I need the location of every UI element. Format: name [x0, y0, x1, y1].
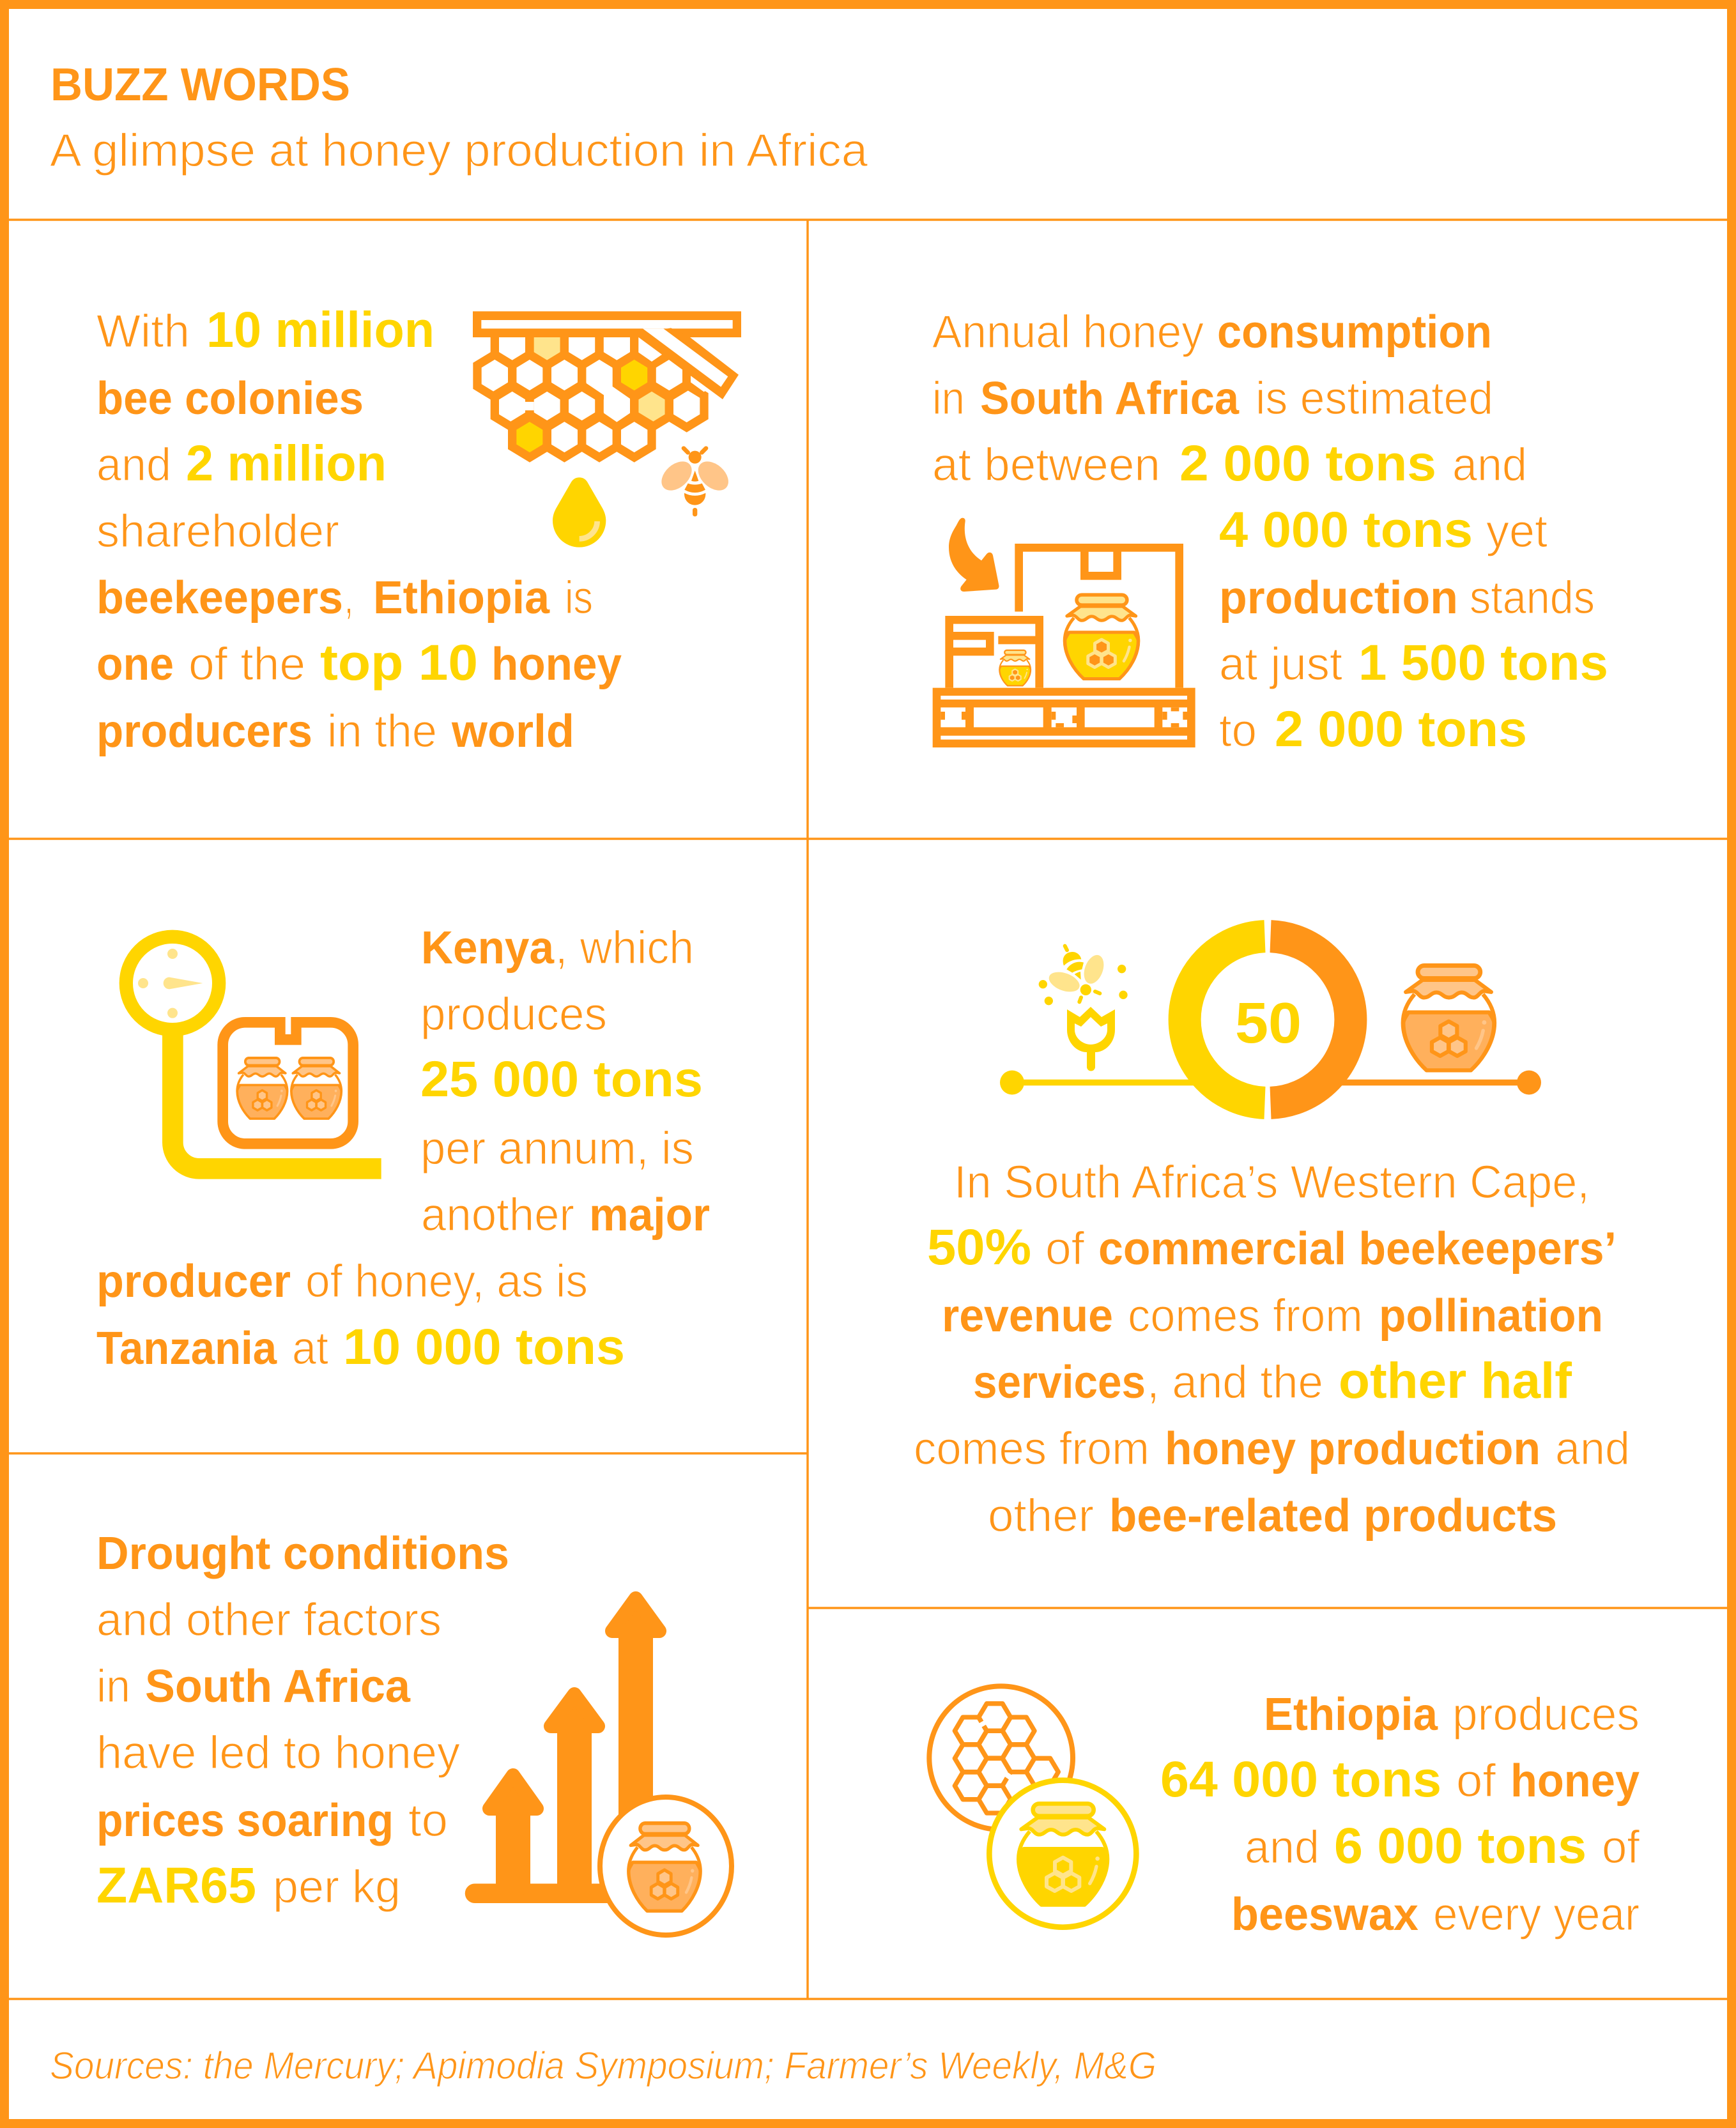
footer: sources: Sources: the Mercury; Apimodia Symposium; Farmer’s Weekly, M&G — [50, 2044, 1156, 2087]
text block: Ethiopia bee colonies: With — [96, 306, 190, 357]
text block: drought and prices: per kg — [273, 1862, 401, 1913]
icon: honey jar — [1018, 1803, 1107, 1905]
text block: Kenya and Tanzania: per annum, is — [420, 1123, 694, 1174]
text block: Ethiopia honey and beeswax — [1160, 1689, 1640, 1940]
text block: Western Cape pollination: honey production — [1165, 1423, 1540, 1474]
icon: scale with honey jars — [126, 937, 381, 1168]
icon: small honey jar — [999, 650, 1031, 685]
title: BUZZ WORDS — [50, 59, 350, 111]
text block: Kenya and Tanzania: major — [589, 1190, 710, 1241]
text block: Ethiopia honey and beeswax: of — [1602, 1822, 1640, 1873]
icon: honeycomb — [473, 311, 741, 457]
text block: South Africa consumption: is estimated — [1256, 373, 1493, 424]
text block: Ethiopia bee colonies — [96, 301, 622, 757]
text block: Kenya and Tanzania: another — [421, 1190, 574, 1241]
donut graphic — [1000, 937, 1541, 1103]
text block: South Africa consumption: in — [932, 373, 965, 424]
icon: parcel — [223, 1017, 353, 1144]
text block: drought and prices: prices soaring — [96, 1795, 394, 1846]
icon: pallet — [933, 688, 1195, 747]
text block: Kenya and Tanzania: produces — [420, 989, 607, 1040]
text block: Ethiopia bee colonies: 2 million — [186, 434, 387, 491]
text block: South Africa consumption: yet — [1486, 506, 1548, 557]
text block: drought and prices: ZAR65 — [96, 1856, 256, 1913]
text block: South Africa consumption: and — [1452, 440, 1527, 491]
text block: South Africa consumption: Annual honey — [932, 307, 1204, 358]
text block: Western Cape pollination: commercial beekeepers’ — [1098, 1223, 1617, 1275]
text block: Western Cape pollination: pollination — [1379, 1290, 1603, 1342]
icon: large honey jar — [1064, 595, 1139, 679]
text block: Kenya and Tanzania: 25 000 tons — [420, 1050, 703, 1107]
text block: Ethiopia honey and beeswax: 6 000 tons — [1334, 1817, 1586, 1874]
text block: South Africa consumption: 2 000 tons — [1275, 700, 1527, 757]
text block: Ethiopia bee colonies: of the — [188, 639, 305, 690]
arrow medium — [551, 1694, 598, 1888]
text block: Kenya and Tanzania: at — [292, 1323, 328, 1374]
icon: large box — [1019, 547, 1179, 688]
text block: Ethiopia honey and beeswax: produces — [1452, 1689, 1640, 1740]
icon: bee — [656, 448, 734, 516]
icon: honey jar left — [237, 1058, 288, 1119]
text block: Western Cape pollination: 50% — [927, 1218, 1031, 1275]
text block: Ethiopia bee colonies: world — [451, 706, 574, 757]
panel: Ethiopia bee colonies — [96, 301, 741, 757]
text block: drought and prices: to — [408, 1795, 448, 1846]
text block: Western Cape pollination: bee-related products — [1109, 1490, 1557, 1542]
text block: Western Cape pollination: and — [1555, 1423, 1630, 1474]
icon: scale dial — [126, 937, 381, 1168]
text block: Western Cape pollination: of — [1045, 1223, 1085, 1275]
text block: South Africa consumption: 4 000 tons — [1219, 501, 1473, 558]
icon: tulip with bee — [1039, 946, 1128, 1071]
text block: Kenya and Tanzania: Kenya — [421, 922, 555, 974]
text block: Ethiopia bee colonies: 10 million — [206, 301, 434, 358]
text block: Ethiopia honey and beeswax: of — [1456, 1756, 1496, 1807]
text block: Western Cape pollination: comes from — [1128, 1290, 1363, 1342]
subtitle: A glimpse at honey production in Africa — [50, 125, 868, 176]
text block: Western Cape pollination: services — [973, 1357, 1146, 1408]
text block: South Africa consumption: South Africa — [980, 373, 1240, 424]
text block: drought and prices: South Africa — [145, 1661, 411, 1712]
text block: Ethiopia bee colonies: Ethiopia — [373, 572, 550, 624]
icon: honey jar — [629, 1823, 700, 1911]
panel: South Africa consumption — [932, 307, 1608, 757]
text block: Kenya and Tanzania: 10 000 tons — [343, 1318, 625, 1375]
text block: South Africa consumption — [932, 307, 1608, 757]
text block: Western Cape pollination: other — [988, 1490, 1094, 1542]
donut orange half — [1270, 937, 1351, 1103]
text block: Ethiopia bee colonies: shareholder — [96, 506, 339, 557]
panel: Western Cape pollination — [914, 937, 1630, 1542]
text block: Ethiopia honey and beeswax: 64 000 tons — [1160, 1750, 1441, 1807]
icon: rising arrows chart — [465, 1598, 732, 1935]
circle badge — [600, 1797, 732, 1935]
text block: Ethiopia honey and beeswax: beeswax — [1231, 1889, 1418, 1940]
text block: Western Cape pollination: , and the — [1147, 1357, 1323, 1408]
text block: Kenya and Tanzania: , which — [555, 922, 694, 974]
icon: curved arrow — [949, 518, 999, 592]
text block: Western Cape pollination: revenue — [942, 1290, 1113, 1342]
icon: honeycomb badge — [929, 1686, 1073, 1830]
text block: Ethiopia bee colonies: honey — [491, 639, 622, 690]
text block: South Africa consumption: stands — [1470, 572, 1595, 624]
panel: drought and prices — [96, 1528, 732, 1935]
text block: South Africa consumption: consumption — [1217, 307, 1492, 358]
text block: Western Cape pollination: comes from — [914, 1423, 1149, 1474]
donut yellow half — [1185, 937, 1265, 1103]
text block: Kenya and Tanzania: Tanzania — [96, 1323, 277, 1374]
icon: small box — [949, 620, 1040, 688]
text block: Ethiopia bee colonies: beekeepers — [96, 572, 343, 624]
text block: Ethiopia bee colonies: is — [565, 572, 593, 624]
header — [50, 59, 868, 176]
text block: Ethiopia honey and beeswax: and — [1245, 1822, 1319, 1873]
icon: honeycomb with drop and bee — [473, 311, 741, 547]
text block: Ethiopia bee colonies: top 10 — [320, 634, 478, 691]
timeline left — [1012, 1080, 1201, 1085]
text block: Kenya and Tanzania — [96, 922, 710, 1375]
donut value: 50 — [1235, 991, 1302, 1055]
text block: South Africa consumption: 1 500 tons — [1358, 634, 1608, 691]
text block: Ethiopia honey and beeswax: Ethiopia — [1264, 1689, 1438, 1740]
text block: Ethiopia bee colonies: bee colonies — [96, 373, 364, 424]
text block: drought and prices: have led to honey — [96, 1727, 460, 1779]
icon: pallet with boxes and arrow — [933, 518, 1195, 747]
text block: South Africa consumption: 2 000 tons — [1179, 434, 1436, 491]
text block: South Africa consumption: production — [1219, 572, 1458, 624]
icon: honey jar right — [291, 1058, 341, 1119]
text block: South Africa consumption: at between — [932, 440, 1160, 491]
arrow large — [612, 1598, 659, 1888]
text block: Western Cape pollination — [914, 1157, 1630, 1542]
text block: Ethiopia honey and beeswax: honey — [1510, 1756, 1640, 1807]
icon: jar badge — [989, 1780, 1136, 1927]
text block: drought and prices: Drought conditions — [96, 1528, 509, 1579]
text block: Ethiopia bee colonies: one — [96, 639, 174, 690]
text block: South Africa consumption: to — [1219, 705, 1257, 756]
panel: Kenya and Tanzania — [96, 922, 710, 1375]
text block: Ethiopia bee colonies: , — [344, 572, 353, 624]
text block: drought and prices: in — [96, 1661, 130, 1712]
text block: Ethiopia bee colonies: in the — [327, 706, 437, 757]
arrow small — [489, 1775, 537, 1888]
text block: Western Cape pollination: other half — [1339, 1352, 1572, 1409]
icon: honey jar — [1403, 965, 1494, 1070]
text block: Ethiopia bee colonies: and — [96, 440, 171, 491]
icon: honeycomb and jar badges — [929, 1686, 1136, 1927]
icon: honey drop — [553, 477, 606, 547]
text block: drought and prices — [96, 1528, 509, 1913]
text block: Ethiopia bee colonies: producers — [96, 706, 312, 757]
text block: Kenya and Tanzania: producer — [96, 1256, 291, 1307]
text block: South Africa consumption: at just — [1219, 639, 1342, 690]
text block: drought and prices: and other factors — [96, 1595, 442, 1646]
text block: Kenya and Tanzania: of honey, as is — [305, 1256, 588, 1307]
timeline right — [1335, 1080, 1529, 1085]
text block: Western Cape pollination: In South Africa’s Western Cape, — [954, 1157, 1590, 1208]
text block: Ethiopia honey and beeswax: every year — [1433, 1889, 1640, 1940]
panel: Ethiopia honey and beeswax — [929, 1686, 1640, 1940]
